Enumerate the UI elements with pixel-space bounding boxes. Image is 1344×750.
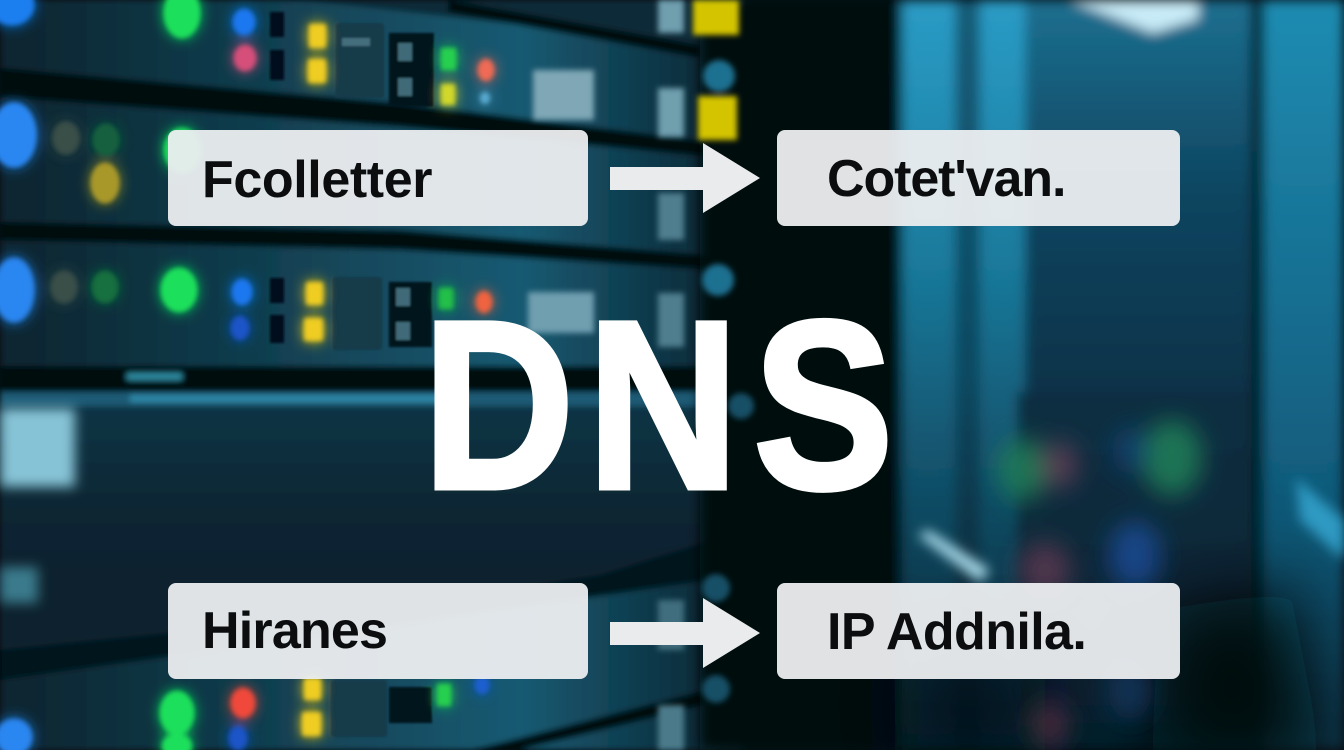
rear rack blocks [528,0,754,750]
dark lower right shadow [895,590,1325,750]
box: top right label: Cotet'van. [827,150,1065,208]
box: bottom right label: IP Addnila. [827,603,1086,661]
arrow: top [610,143,760,213]
box: bottom right label [777,583,1180,679]
streak and highlight on right rack [918,478,1344,582]
box: top left label: Fcolletter [202,151,432,209]
arrow: bottom [610,598,760,668]
rack LEDs, top row [0,0,494,107]
rack LEDs, bottom row [0,676,489,750]
blurred lights on the right rack [998,420,1202,749]
box: top right label [777,130,1180,226]
box: bottom left label [168,583,588,679]
rack LEDs, second row [0,103,200,203]
box: top left label [168,130,588,226]
rack LEDs, third row [0,258,492,350]
box: bottom left label: Hiranes [202,602,387,660]
